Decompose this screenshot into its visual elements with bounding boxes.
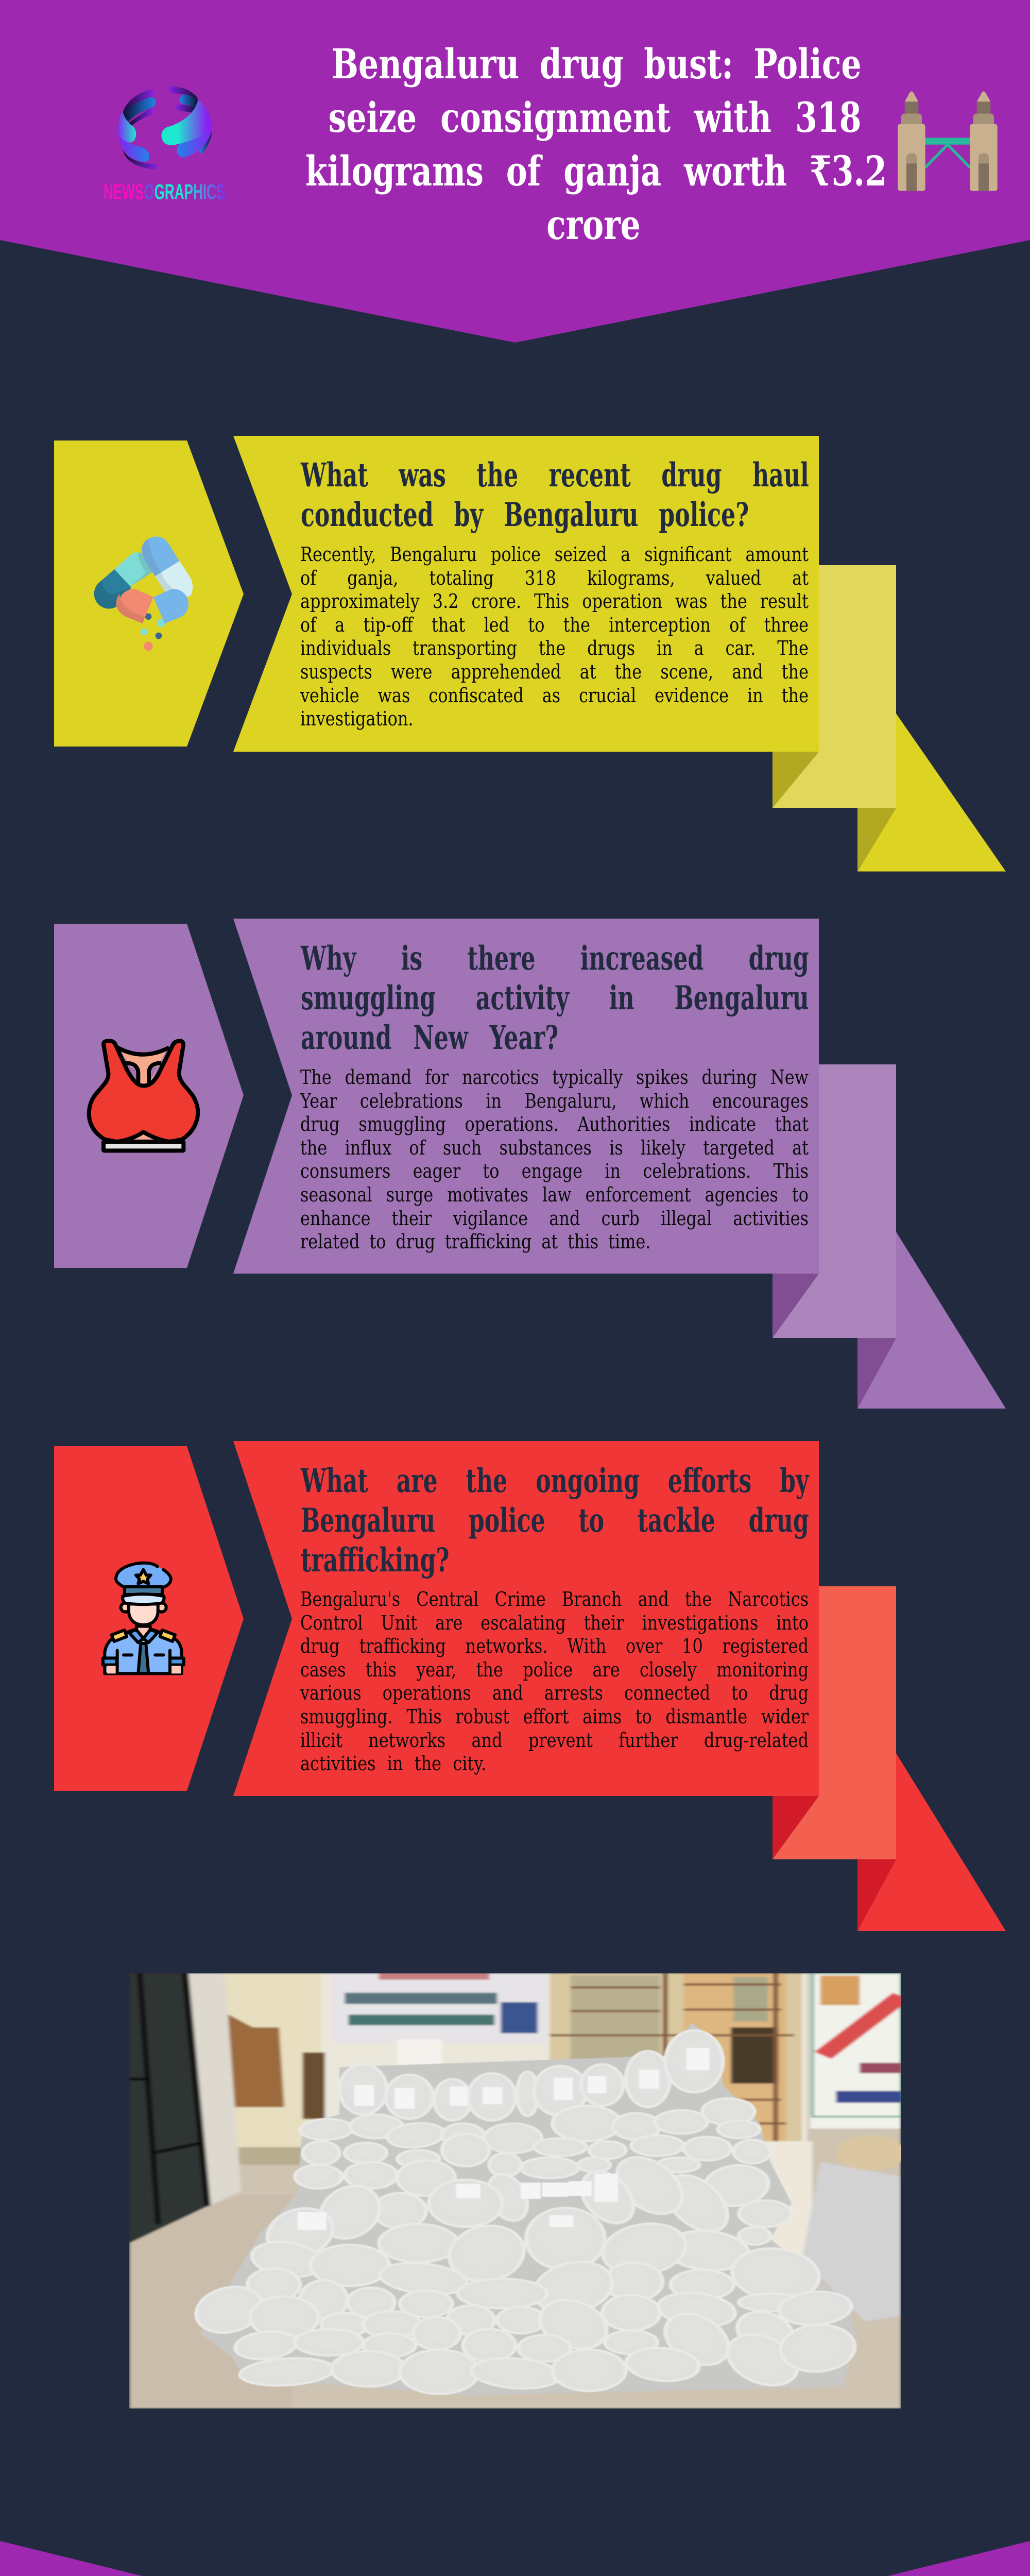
body text bbox=[300, 1066, 809, 1253]
body text: related to drug trafficking at this time. bbox=[300, 1230, 650, 1253]
panel: New Year smuggling bbox=[54, 919, 1006, 1409]
header banner background bbox=[0, 0, 1030, 343]
heading: trafficking? bbox=[301, 1541, 449, 1580]
icon: twin towers landmark bbox=[898, 91, 998, 191]
body text: smuggling. This robust effort aims to dismantle wider bbox=[300, 1705, 809, 1728]
heading: conducted by Bengaluru police? bbox=[301, 496, 749, 534]
title: seize consignment with 318 bbox=[329, 93, 862, 142]
heading bbox=[301, 1462, 810, 1580]
body text: cases this year, the police are closely monitoring bbox=[300, 1658, 809, 1681]
ribbon shapes bbox=[54, 436, 1006, 872]
footer banner background bbox=[0, 2541, 1030, 2576]
photo: seized ganja sacks bbox=[129, 1973, 901, 2409]
body text: vehicle was confiscated as crucial evidence in the bbox=[300, 684, 809, 707]
body text: Control Unit are escalating their investigations into bbox=[300, 1612, 809, 1634]
icon: police officer bbox=[101, 1561, 185, 1675]
heading: What are the ongoing efforts by bbox=[301, 1462, 809, 1500]
body text: consumers eager to engage in celebrations. This bbox=[300, 1160, 809, 1182]
heading bbox=[301, 456, 809, 534]
body text: the influx of such substances is likely targeted at bbox=[300, 1137, 809, 1159]
body text: drug smuggling operations. Authorities indicate that bbox=[300, 1113, 809, 1136]
heading: Bengaluru police to tackle drug bbox=[301, 1501, 809, 1540]
body text: suspects were apprehended at the scene, and the bbox=[300, 660, 809, 683]
body text: investigation. bbox=[300, 707, 414, 730]
heading: around New Year? bbox=[301, 1019, 558, 1057]
body text: illicit networks and prevent further drug-related bbox=[300, 1729, 809, 1752]
body text: Bengaluru's Central Crime Branch and the Narcotics bbox=[300, 1588, 809, 1611]
heading: What was the recent drug haul bbox=[301, 456, 809, 495]
body text: of ganja, totaling 318 kilograms, valued at bbox=[300, 567, 809, 589]
body text: drug trafficking networks. With over 10 registered bbox=[300, 1635, 809, 1657]
ribbon shapes bbox=[54, 1441, 1006, 1931]
logo: Newsographics header bbox=[104, 87, 225, 204]
body text: individuals transporting the drugs in a car. The bbox=[300, 637, 809, 659]
body text: Recently, Bengaluru police seized a significant amount bbox=[300, 543, 809, 566]
title: crore bbox=[546, 200, 641, 249]
body text: approximately 3.2 crore. This operation was the result bbox=[300, 590, 809, 613]
panel: recent drug haul bbox=[54, 436, 1006, 872]
icon: sports bra bbox=[87, 1039, 200, 1153]
body text: activities in the city. bbox=[300, 1752, 486, 1775]
panel: ongoing police efforts bbox=[54, 1441, 1006, 1931]
body text: enhance their vigilance and curb illegal activities bbox=[300, 1207, 809, 1230]
icon: pills bbox=[94, 536, 193, 651]
ribbon shapes bbox=[54, 919, 1006, 1409]
title: kilograms of ganja worth ₹3.2 bbox=[305, 147, 887, 195]
heading bbox=[301, 939, 809, 1057]
body text bbox=[300, 1588, 809, 1775]
title: Bengaluru drug bust: Police bbox=[332, 40, 862, 88]
body text: Year celebrations in Bengaluru, which encourages bbox=[300, 1090, 809, 1112]
body text: of a tip-off that led to the interception of three bbox=[300, 614, 809, 636]
heading: Why is there increased drug bbox=[301, 939, 809, 978]
body text: seasonal surge motivates law enforcement agencies to bbox=[300, 1183, 809, 1206]
title bbox=[305, 40, 887, 249]
body text: various operations and arrests connected to drug bbox=[300, 1682, 809, 1704]
heading: smuggling activity in Bengaluru bbox=[301, 979, 809, 1018]
body text bbox=[300, 543, 809, 730]
body text: The demand for narcotics typically spikes during New bbox=[300, 1066, 809, 1089]
